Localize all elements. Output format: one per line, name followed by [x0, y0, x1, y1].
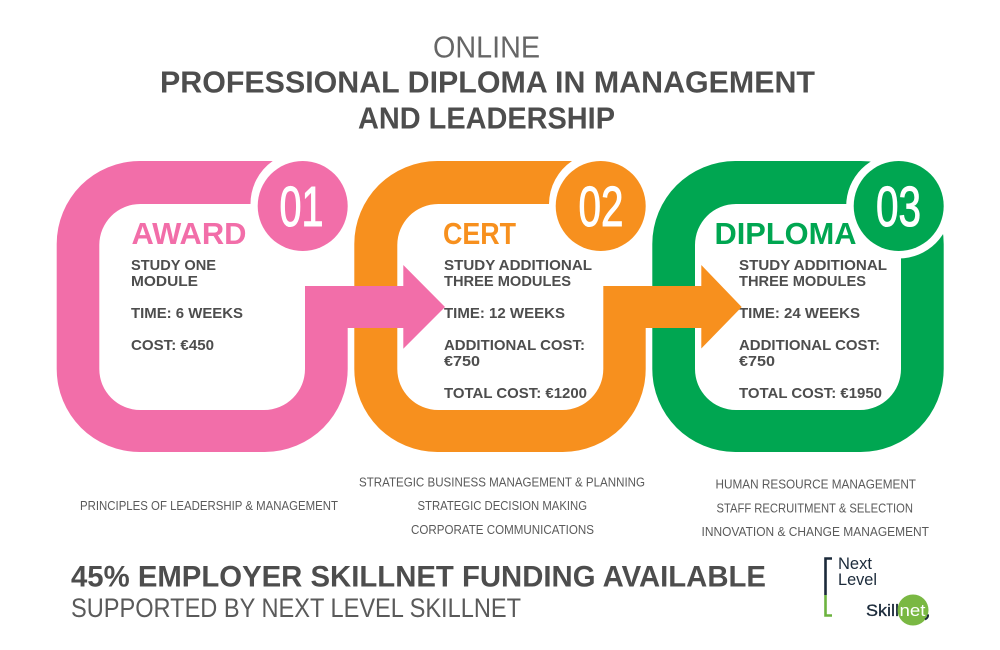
logo: next level skillnet: [826, 554, 928, 626]
panel: cert step 02: [354, 161, 742, 452]
diploma modules: STAFF RECRUITMENT & SELECTION: [716, 502, 913, 516]
award details: [131, 257, 243, 354]
orange ring with arrow: [354, 161, 742, 452]
funding callout: [71, 561, 766, 623]
cert details: [444, 257, 592, 402]
diploma details: THREE MODULES: [739, 273, 866, 290]
heading: cert: CERT: [443, 216, 516, 251]
logo: next level skillnet: Next: [838, 554, 872, 573]
number badge 01: [258, 161, 348, 251]
cert details: ADDITIONAL COST:: [444, 337, 585, 354]
award details: TIME: 6 WEEKS: [131, 305, 243, 322]
panel: cert step 02: 02: [578, 175, 624, 239]
award details: MODULE: [131, 273, 198, 290]
cert details: TIME: 12 WEEKS: [444, 305, 565, 322]
award modules: PRINCIPLES OF LEADERSHIP & MANAGEMENT: [80, 499, 338, 513]
cert details: THREE MODULES: [444, 273, 571, 290]
diploma modules: INNOVATION & CHANGE MANAGEMENT: [702, 525, 929, 539]
cert details: €750: [444, 353, 480, 370]
logo: next level skillnet: Level: [838, 570, 877, 589]
funding callout: SUPPORTED BY NEXT LEVEL SKILLNET: [71, 593, 521, 623]
funding callout: 45% EMPLOYER SKILLNET FUNDING AVAILABLE: [71, 561, 766, 594]
green rounded ring: [652, 161, 944, 452]
title: AND LEADERSHIP: [358, 100, 615, 136]
title: ONLINE: [433, 29, 540, 64]
panel: award step 01: 01: [280, 175, 324, 239]
heading: diploma: DIPLOMA: [714, 216, 856, 251]
diploma details: [739, 257, 887, 402]
award details: COST: €450: [131, 337, 214, 354]
award details: STUDY ONE: [131, 257, 216, 274]
heading: award: AWARD: [132, 216, 246, 251]
number badge 03: [854, 161, 944, 251]
cert modules: STRATEGIC DECISION MAKING: [418, 499, 587, 513]
diploma details: TIME: 24 WEEKS: [739, 305, 860, 322]
title: [160, 29, 815, 135]
diploma details: TOTAL COST: €1950: [739, 385, 882, 402]
cert modules: CORPORATE COMMUNICATIONS: [411, 523, 594, 537]
diploma details: ADDITIONAL COST:: [739, 337, 880, 354]
cert details: STUDY ADDITIONAL: [444, 257, 592, 274]
panel: award step 01: [57, 161, 445, 452]
diploma details: €750: [739, 353, 775, 370]
logo: next level skillnet: Skill: [866, 601, 899, 620]
cert details: TOTAL COST: €1200: [444, 385, 587, 402]
title: PROFESSIONAL DIPLOMA IN MANAGEMENT: [160, 65, 815, 100]
panel: diploma step 03: 03: [876, 175, 921, 239]
cert modules: [359, 476, 645, 537]
number badge 02: [556, 161, 646, 251]
diploma modules: [702, 477, 929, 539]
panel: diploma step 03: [652, 154, 951, 452]
pink ring with arrow: [57, 161, 445, 452]
cert modules: STRATEGIC BUSINESS MANAGEMENT & PLANNING: [359, 476, 645, 490]
logo: next level skillnet: net: [900, 601, 926, 620]
diploma details: STUDY ADDITIONAL: [739, 257, 887, 274]
diploma modules: HUMAN RESOURCE MANAGEMENT: [716, 477, 916, 491]
